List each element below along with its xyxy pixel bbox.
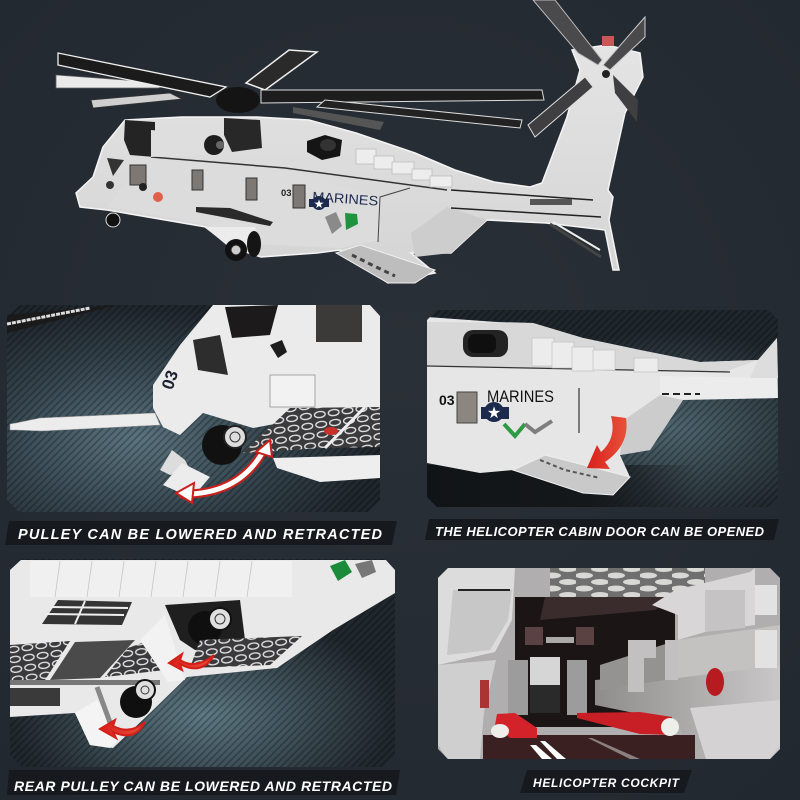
windows [225,305,278,338]
ribbed sponson [30,561,292,597]
double-headed arrow [176,440,272,503]
interior base [438,568,780,759]
hex ceiling [550,568,705,598]
red round button [706,668,724,696]
lower vent [10,688,60,706]
far wall [508,660,528,715]
right edge hinges [755,585,777,668]
rear strut [75,700,120,748]
wheel front [188,608,231,645]
top deck [427,322,758,372]
gear bay [165,600,245,650]
dorsal steps [532,338,658,372]
red arrow [587,416,627,469]
strut doors [140,615,185,682]
floor [483,735,695,759]
exhaust cluster [124,118,262,157]
caption: cockpit: HELICOPTER COCKPIT [533,776,681,790]
floor shadow [427,465,697,507]
nose probe [10,413,160,431]
nose details [106,158,163,227]
underside wedge [620,395,683,455]
underside hull [10,560,395,748]
caption: rear pulley [7,770,400,795]
black knob [270,340,287,358]
red seats left [495,713,537,738]
ramp grid left [10,641,70,682]
vent grille [42,600,132,625]
caption: rear pulley: REAR PULLEY CAN BE LOWERED AND RETRACTED [14,778,392,794]
overhead boxes [525,627,594,645]
nose body [153,305,380,435]
main helicopter model [56,0,645,283]
far door [530,657,560,689]
rear ramp [336,245,435,283]
hatch [270,375,315,407]
tail rail [712,398,776,400]
red seats right [577,712,672,735]
stepped dorsal blocks [356,149,452,187]
wheel rear [120,680,155,718]
MARINES lettering: 03 [281,188,292,199]
windows [130,165,305,208]
landing wheel [225,231,261,261]
insignia text: MARINES [487,387,554,406]
upper deck line [151,157,447,190]
red arrow upper [169,654,214,670]
right wall [595,665,780,759]
open hatches [325,212,358,234]
caption: cabin door [425,519,779,540]
MARINES lettering: MARINES [312,189,379,209]
tail rotor [528,0,645,137]
landing gear door [160,450,190,475]
MARINES lettering [281,188,379,211]
red arrow lower [100,720,145,738]
panel background [427,310,778,507]
wheel assembly [202,425,246,465]
tail fin and fuselage [76,45,643,283]
sponson intake [307,135,342,160]
MARINES lettering: ★ [314,197,324,211]
insignia text [440,390,554,422]
caption: cabin door: THE HELICOPTER CABIN DOOR CAN BE OPENED [435,524,765,539]
ramp [513,455,630,495]
caption: pulley: PULLEY CAN BE LOWERED AND RETRACTED [18,527,383,543]
underside wedge [411,207,487,257]
side pod [196,207,273,226]
cabin window [457,392,477,423]
lower right block [690,700,780,759]
panel background [34,649,366,767]
left pillar [438,568,515,665]
wall columns [628,640,678,692]
hatches [330,560,352,581]
ramp panel [243,407,380,453]
insignia text: 03 [439,392,455,408]
tail fin strip [750,338,778,378]
ramp grid right [190,636,302,668]
engine intake [463,330,508,357]
tail rails [451,190,601,257]
panel: pulley [7,305,380,512]
marker 03: 03 [158,368,182,392]
caption: cockpit [520,770,692,793]
panel: cockpit [438,568,780,759]
under-bulge [273,455,380,482]
lower hull panel [107,160,380,248]
cabin door [578,388,580,433]
dark interior [515,597,675,727]
right upper blocks [652,568,755,640]
insignia text: ★ [487,405,501,422]
corner strip [7,305,117,333]
panel: rear pulley [10,559,395,767]
fuselage [427,317,778,476]
main rotor [56,50,544,130]
open hatches [504,421,552,436]
panel: cabin door [427,310,778,507]
panel background [7,305,380,512]
caption: pulley [5,521,397,545]
